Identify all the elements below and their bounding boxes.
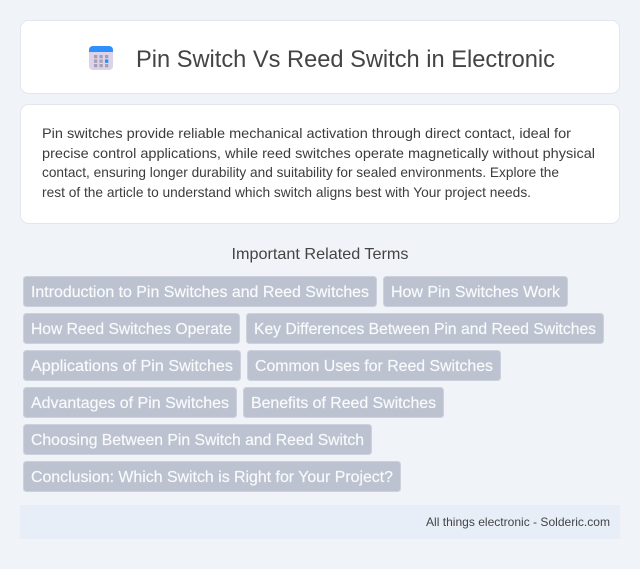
tag: benefits bbox=[244, 388, 444, 418]
heading: important related terms: Important Related Terms bbox=[232, 246, 408, 263]
tag: how pin switches work bbox=[384, 276, 568, 306]
footer bbox=[20, 505, 620, 539]
tag: key differences: Key Differences Between Pin and Reed Switches bbox=[254, 321, 596, 338]
summary text: rest of the article to understand which switch aligns best with Your project needs. bbox=[42, 184, 531, 200]
tag: introduction bbox=[24, 276, 376, 306]
tag: advantages bbox=[24, 388, 236, 418]
panel: summary bbox=[20, 104, 620, 224]
summary text bbox=[42, 125, 595, 200]
tag list bbox=[24, 276, 604, 492]
tag: applications bbox=[24, 350, 240, 380]
tag: applications: Applications of Pin Switches bbox=[31, 358, 233, 375]
tag: common uses bbox=[248, 350, 500, 380]
panel: title header bbox=[20, 20, 620, 94]
icon: calendar bbox=[89, 46, 113, 70]
tag: key differences bbox=[246, 314, 604, 344]
tag: introduction: Introduction to Pin Switches and Reed Switches bbox=[31, 284, 369, 301]
summary text: Pin switches provide reliable mechanical activation through direct contact, ideal for bbox=[42, 125, 571, 141]
tag: conclusion bbox=[24, 462, 400, 492]
summary text: precise control applications, while reed switches operate magnetically without physical bbox=[42, 145, 595, 161]
tag: how reed switches operate: How Reed Switches Operate bbox=[31, 321, 232, 338]
tag: benefits: Benefits of Reed Switches bbox=[251, 395, 436, 412]
tag: common uses: Common Uses for Reed Switches bbox=[255, 358, 493, 375]
footer: All things electronic - Solderic.com bbox=[426, 515, 610, 529]
tag: conclusion: Conclusion: Which Switch is Right for Your Project? bbox=[31, 469, 393, 486]
tag: how reed switches operate bbox=[24, 314, 240, 344]
tag: choosing bbox=[24, 424, 372, 454]
summary text: contact, ensuring longer durability and suitability for sealed environments. Explore the bbox=[42, 164, 559, 180]
tag: how pin switches work: How Pin Switches Work bbox=[391, 284, 561, 301]
tag: advantages: Advantages of Pin Switches bbox=[31, 395, 229, 412]
tag: choosing: Choosing Between Pin Switch and Reed Switch bbox=[31, 432, 364, 449]
title: Pin Switch Vs Reed Switch in Electronic bbox=[136, 46, 555, 73]
